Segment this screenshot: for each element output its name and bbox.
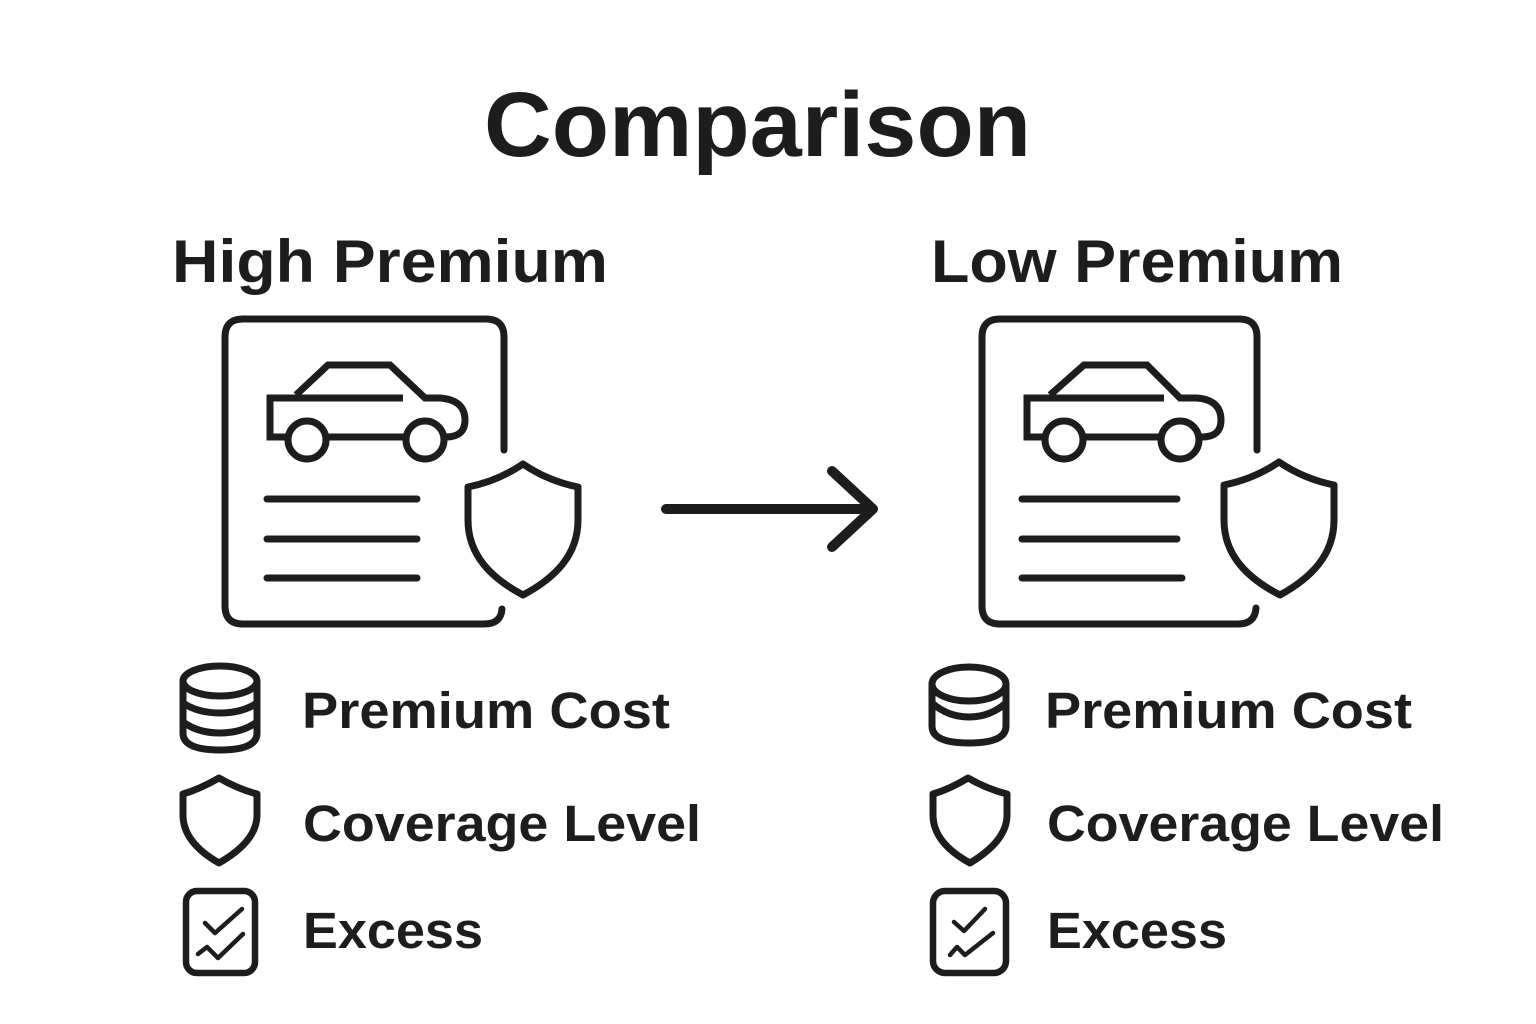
document outline — [225, 319, 504, 624]
icon: low premium policy document — [982, 319, 1334, 624]
document outline — [982, 319, 1257, 624]
label: Coverage Level — [1047, 795, 1444, 852]
icon: shield — [933, 778, 1007, 863]
list: low premium — [932, 667, 1444, 973]
icon: checklist — [186, 891, 255, 973]
label: Premium Cost — [302, 682, 670, 739]
heading: high premium: High Premium — [172, 228, 608, 295]
label: Coverage Level — [303, 795, 701, 852]
icon: car — [270, 365, 465, 459]
icon: shield — [183, 778, 257, 863]
list: high premium — [183, 666, 701, 973]
label: Excess — [303, 902, 483, 959]
text lines — [267, 499, 417, 578]
icon: shield — [1224, 462, 1334, 595]
icon: high premium policy document — [225, 319, 578, 624]
label: Excess — [1047, 902, 1227, 959]
icon: checklist — [933, 891, 1006, 973]
title: Comparison — [484, 74, 1031, 176]
heading: low premium: Low Premium — [931, 228, 1343, 295]
icon: coins — [183, 666, 257, 750]
arrow — [666, 471, 873, 547]
label: Premium Cost — [1045, 682, 1412, 739]
text lines — [1022, 499, 1182, 578]
icon: shield — [468, 464, 578, 595]
icon: car — [1027, 365, 1221, 459]
icon: coins — [932, 667, 1006, 743]
